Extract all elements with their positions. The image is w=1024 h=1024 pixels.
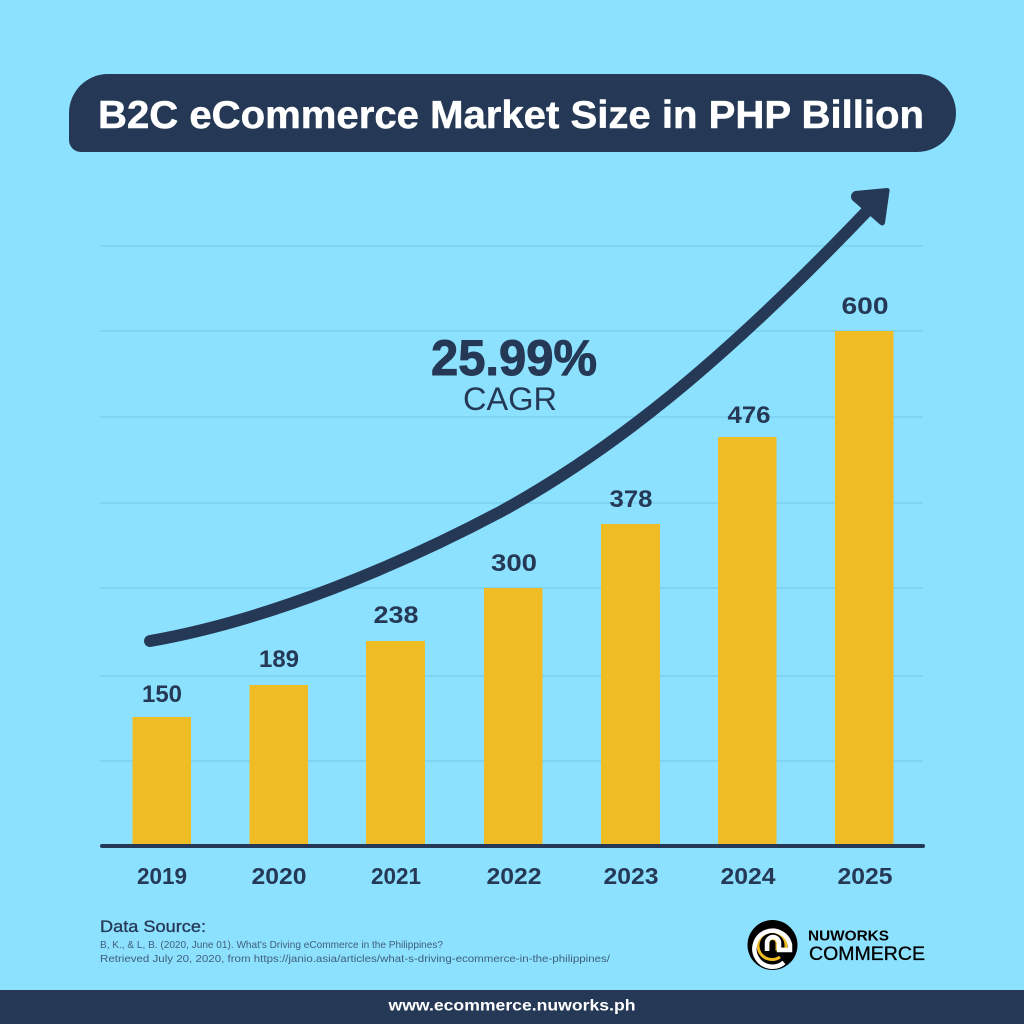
logo: Nuworks Commerce: COMMERCE [809, 944, 925, 965]
year labels: 2024 [720, 863, 776, 889]
CAGR callout: 25.99% [431, 330, 597, 386]
footer bar [0, 990, 1024, 1024]
bars [132, 331, 894, 846]
year labels: 2022 [486, 863, 542, 889]
value labels: 189 [259, 646, 299, 673]
year labels: 2020 [252, 863, 306, 889]
value labels [142, 293, 888, 708]
year labels: 2025 [838, 863, 893, 889]
data source: B, K., & L, B. (2020, June 01). What's Driving eCommerce in the Philippines? [100, 939, 443, 951]
footer bar: www.ecommerce.nuworks.ph [387, 998, 636, 1014]
bar chart [102, 293, 923, 889]
growth arrow [150, 188, 890, 641]
year labels [137, 863, 893, 889]
axis line [102, 844, 923, 848]
logo: Nuworks Commerce [748, 920, 925, 970]
value labels: 238 [374, 602, 418, 629]
value labels: 300 [491, 550, 537, 577]
icon: logo mark [748, 920, 798, 970]
data source: Data Source: [100, 918, 206, 936]
CAGR callout [431, 330, 597, 417]
year labels: 2023 [604, 863, 658, 889]
data source: Retrieved July 20, 2020, from https://janio.asia/articles/what-s-driving-ecommerce-in-the-philippines/ [100, 953, 610, 965]
value labels: 150 [142, 681, 182, 708]
year labels: 2019 [137, 863, 187, 889]
logo: Nuworks Commerce: NUWORKS [808, 928, 889, 944]
value labels: 476 [728, 402, 770, 429]
CAGR callout: CAGR [463, 381, 557, 417]
data source [100, 918, 610, 965]
title banner [69, 74, 956, 152]
value labels: 378 [610, 486, 652, 513]
year labels: 2021 [371, 863, 421, 889]
value labels: 600 [842, 293, 888, 320]
title banner: B2C eCommerce Market Size in PHP Billion [98, 94, 924, 137]
